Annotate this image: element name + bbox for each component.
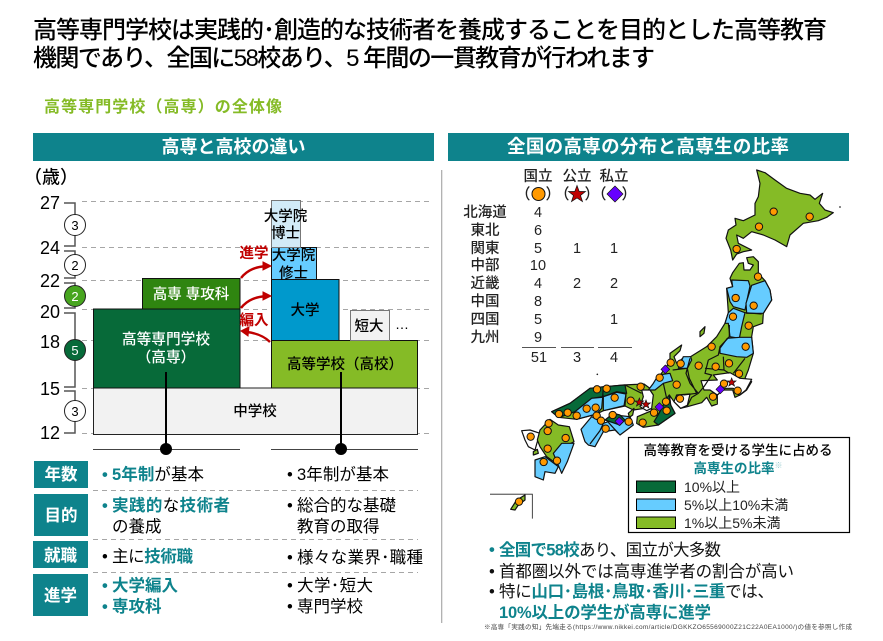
table: schools by region: 9 [534, 330, 542, 346]
years circle: 2 [64, 254, 86, 276]
summary text: 全国で58校あり、国立が大多数 [499, 540, 721, 560]
heading: distribution and ratio [448, 133, 849, 161]
progress arrows [241, 262, 271, 342]
table: schools by region: 関東 [470, 240, 500, 257]
map dots [839, 206, 841, 208]
legend: 高等教育を受ける学生に占める [644, 442, 832, 458]
table: schools by region: 4 [534, 276, 542, 292]
block: university: 大学 [290, 302, 320, 319]
years circle: 2: 2 [71, 258, 79, 273]
table: schools by region: 51 [531, 350, 547, 366]
block: university [272, 280, 339, 340]
block: junior college [350, 310, 390, 340]
table: schools by region: （ ） [554, 186, 600, 203]
table: schools by region: 1 [610, 312, 618, 328]
block: master: 修士 [279, 265, 308, 282]
public school markers [635, 378, 736, 408]
kosen column text [102, 464, 230, 616]
years circle: 3: 3 [71, 218, 79, 233]
kosen column text: 実践的な技術者 [112, 496, 230, 515]
years circle: dark green 5: 5 [71, 343, 79, 358]
summary text: 特に山口･島根･鳥取･香川･三重では、 [499, 582, 774, 601]
table: schools by region: （ ） [515, 186, 561, 203]
Honshu regions [552, 257, 772, 427]
block: junior high school: 中学校 [233, 403, 277, 420]
high school column text: • [287, 549, 293, 567]
table: schools by region: 6 [534, 223, 542, 239]
legend: 1%以上5%未満 [684, 515, 780, 531]
table: schools by region: 四国 [470, 311, 500, 328]
subtitle: 高等専門学校（高専）の全体像 [44, 97, 282, 116]
age axis numbers: 18 [40, 332, 60, 352]
high school column text: 専門学校 [297, 597, 363, 616]
age axis numbers: 20 [40, 302, 60, 322]
kosen column text: 専攻科 [112, 597, 162, 616]
row label: purpose [34, 494, 88, 536]
high school column text [287, 465, 423, 616]
table: schools by region: 中国 [470, 293, 500, 310]
footnote: ※高専「実践の知」先端走る(https://www.nikkei.com/article/DGKKZO65569000Z21C22A0EA1000/)の値を参照し作成 [484, 622, 852, 631]
title: 高等専門学校は実践的･創造的な技術者を養成することを目的とした高等教育 [33, 17, 827, 44]
row label: employment: 就職 [44, 546, 78, 565]
block: junior high school [94, 388, 418, 434]
block: kosen [94, 309, 240, 388]
connector: kosen [93, 372, 240, 455]
table: schools by region: 1 [610, 241, 618, 257]
table: schools by region: 4 [610, 350, 618, 366]
Kyushu [522, 419, 574, 480]
years circle: 3: 3 [71, 404, 79, 419]
heading: distribution and ratio: 全国の高専の分布と高専生の比率 [507, 136, 789, 157]
high school column text: • [287, 466, 293, 484]
block: kosen advanced course: 高専 専攻科 [153, 286, 230, 303]
table: schools by region: 8 [534, 294, 542, 310]
summary text: • [489, 563, 495, 581]
kosen column text: • [102, 577, 108, 595]
block: junior college: 短大 [354, 318, 384, 335]
table: schools by region: 2 [573, 276, 581, 292]
age unit label: （歳） [24, 168, 78, 188]
high school column text: 総合的な基礎 [297, 496, 396, 515]
block: kosen: （高専） [137, 349, 195, 366]
summary text: 首都圏以外では高専進学者の割合が高い [499, 562, 794, 581]
table: schools by region: 4 [534, 205, 542, 221]
kosen column text: 主に技術職 [112, 547, 194, 566]
block: doctor: 大学院 [264, 208, 307, 225]
high school column text: • [287, 577, 293, 595]
block: master [272, 247, 316, 282]
table: schools by region: 1 [573, 241, 581, 257]
table: schools by region: 10 [530, 258, 546, 274]
table: schools by region: 国立 [524, 168, 552, 185]
block: doctor [264, 200, 307, 248]
summary text: • [489, 541, 495, 559]
summary text: • [489, 583, 495, 601]
table: schools by region: 5 [534, 241, 542, 257]
summary text [489, 540, 794, 622]
kosen column text: 大学編入 [112, 575, 178, 595]
block: high school: 高等学校（高校） [287, 355, 403, 373]
Shikoku [581, 408, 634, 447]
table: schools by region: 私立 [600, 168, 628, 185]
years circle: 3 [64, 214, 86, 236]
kosen column text: • [102, 598, 108, 616]
age scale brackets [64, 203, 75, 433]
kosen column text: の養成 [112, 517, 162, 536]
label: advance: 進学 [240, 244, 268, 262]
legend: 10%以上 [684, 479, 740, 495]
table: schools by region: （ ） [591, 186, 637, 203]
high school column text: • [287, 497, 293, 515]
block: doctor: 博士 [271, 225, 300, 242]
kosen column text: • [102, 548, 108, 566]
age axis numbers: 12 [40, 423, 60, 443]
years circle: dark green 5 [64, 340, 86, 360]
high school column text: 3年制が基本 [297, 465, 390, 484]
block: kosen: 高等専門学校 [122, 330, 210, 348]
row label: years [34, 461, 88, 488]
years circle: green 2: 2 [71, 289, 79, 304]
block: high school [272, 340, 418, 388]
map of Japan [490, 170, 841, 519]
kosen column text: 5年制が基本 [112, 464, 204, 484]
row label: further study: 進学 [44, 585, 77, 605]
ellipsis: … [395, 316, 409, 332]
legend: 高専生の比率 [694, 461, 774, 476]
table: schools by region: 公立 [562, 168, 592, 185]
age axis numbers: 22 [40, 271, 60, 291]
connector: high school [271, 372, 418, 455]
age axis numbers [40, 193, 60, 443]
years circle: 3 [64, 400, 86, 422]
high school column text: • [287, 598, 293, 616]
table: schools by region: 九州 [470, 329, 500, 346]
age axis numbers: 15 [40, 379, 60, 399]
label: transfer: 編入 [240, 312, 269, 329]
row label: purpose: 目的 [44, 506, 78, 525]
heading: differences between kosen and high school: 高専と高校の違い [162, 137, 306, 157]
legend: 5%以上10%未満 [684, 497, 788, 513]
block: kosen advanced course [142, 278, 240, 309]
age axis numbers: 24 [40, 238, 60, 258]
high school column text: 教育の取得 [297, 517, 380, 536]
title [33, 17, 827, 72]
table: schools by region: 中部 [470, 257, 500, 274]
private school markers [615, 365, 725, 426]
table: schools by region: 5 [534, 312, 542, 328]
table: schools by region: 東北 [470, 222, 500, 239]
row label: years: 年数 [44, 464, 78, 484]
kosen column text: • [102, 466, 108, 484]
table: schools by region: 北海道 [463, 204, 507, 221]
years circle: green 2 [64, 286, 86, 306]
title: 機関であり、全国に58校あり、5 年間の一貫教育が行われます [33, 45, 655, 72]
high school column text: 大学･短大 [297, 576, 373, 595]
row label: further study [33, 574, 88, 616]
national school markers [515, 208, 813, 505]
table: schools by region: 2 [610, 276, 618, 292]
Hokkaido [726, 170, 833, 260]
kosen column text: • [102, 497, 108, 515]
row label: employment [33, 541, 88, 568]
table: schools by region: 近畿 [470, 275, 500, 292]
legend [628, 438, 850, 532]
high school column text: 様々な業界･職種 [297, 548, 423, 567]
table: schools by region [463, 168, 637, 366]
heading: differences between kosen and high school [33, 133, 434, 161]
block: master: 大学院 [272, 247, 315, 264]
legend: ※ [774, 461, 782, 470]
summary text: 10%以上の学生が高専に進学 [499, 602, 711, 622]
age axis numbers: 27 [40, 193, 60, 213]
table: schools by region: 3 [573, 350, 581, 366]
Okinawa [511, 495, 525, 510]
